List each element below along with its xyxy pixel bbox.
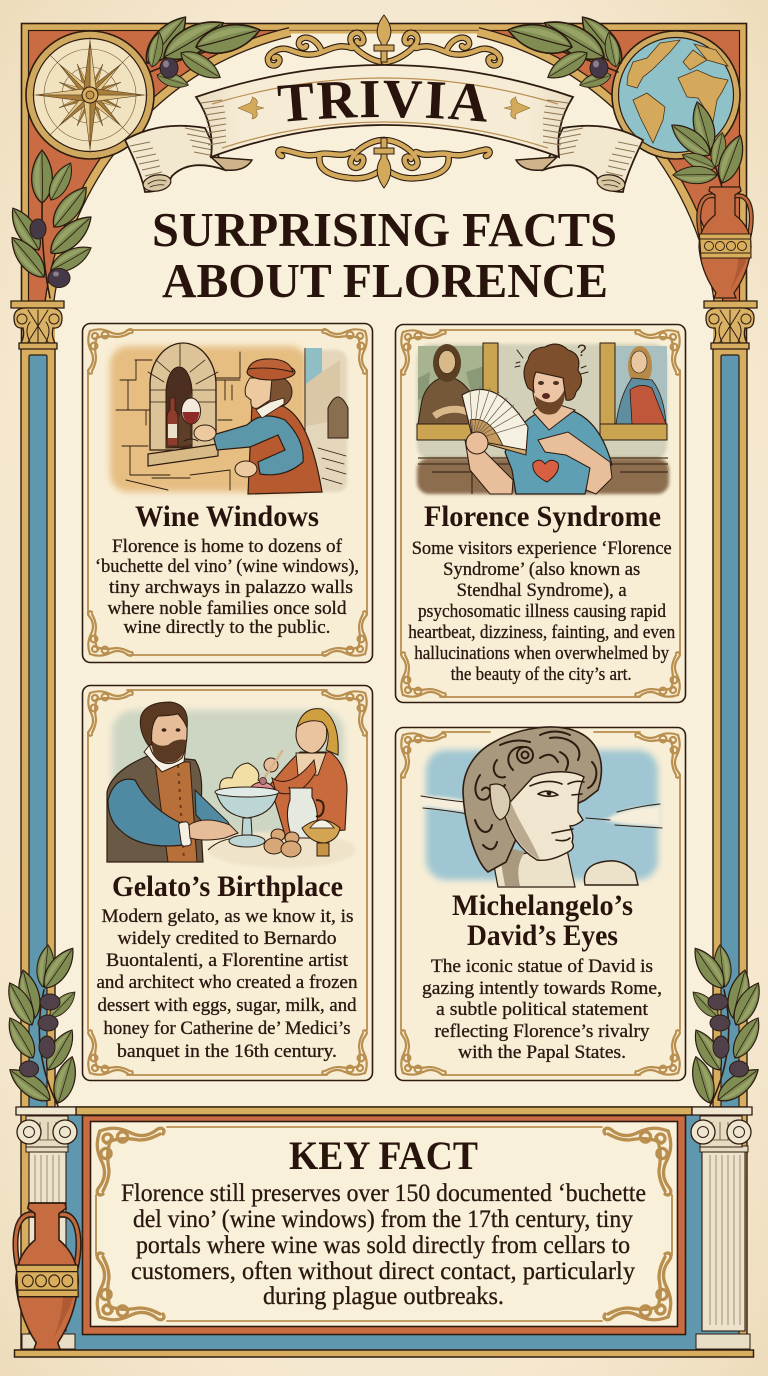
text block: portals where wine was sold directly from cellars to xyxy=(136,1232,630,1259)
text block: Some visitors experience ‘Florence xyxy=(412,539,672,559)
text block: Florence is home to dozens of xyxy=(112,537,343,557)
text block: psychosomatic illness causing rapid xyxy=(418,602,667,622)
panel: florence syndrome xyxy=(396,324,686,702)
text block: widely credited to Bernardo xyxy=(118,929,336,949)
text block: heartbeat, dizziness, fainting, and even xyxy=(408,623,675,643)
text block: Modern gelato, as we know it, is xyxy=(102,907,354,927)
title: TRIVIA: TRIVIA xyxy=(277,80,487,122)
text block: during plague outbreaks. xyxy=(263,1283,504,1310)
text block: Florence still preserves over 150 documented ‘buchette xyxy=(121,1180,646,1207)
heading: KEY FACT xyxy=(289,1133,478,1178)
title: TRIVIA xyxy=(277,80,487,122)
text block: hallucinations when overwhelmed by xyxy=(414,644,670,664)
panel: gelato's birthplace xyxy=(82,686,372,1080)
heading: Surprising Facts About Florence: SURPRISING FACTS xyxy=(152,202,617,257)
text block: tiny archways in palazzo walls xyxy=(109,578,353,598)
text block: gazing intently towards Rome, xyxy=(422,979,662,999)
right column xyxy=(704,301,757,1108)
text block: and architect who created a frozen xyxy=(96,973,358,993)
text block: with the Papal States. xyxy=(458,1043,626,1063)
heading: Gelato’s Birthplace xyxy=(112,870,343,903)
ornament below banner xyxy=(278,138,490,188)
lower right column xyxy=(691,1107,752,1349)
text block xyxy=(408,539,675,685)
panel: wine windows xyxy=(82,324,372,662)
base ledge xyxy=(14,1350,754,1357)
panel: michelangelo's david's eyes xyxy=(396,727,686,1080)
text block: reflecting Florence’s rivalry xyxy=(434,1022,650,1042)
text block: honey for Catherine de’ Medici’s xyxy=(104,1019,350,1039)
text block: del vino’ (wine windows) from the 17th century, tiny xyxy=(133,1206,633,1233)
olive branch lower left xyxy=(1,943,81,1108)
left column xyxy=(11,301,64,1108)
illustration: man at wine window xyxy=(110,343,348,494)
olive branch upper left side xyxy=(4,150,98,298)
frame: arch with terracotta spandrels xyxy=(22,24,746,1114)
illustration: Buontalenti presenting gelato xyxy=(107,702,356,868)
heading: Surprising Facts About Florence xyxy=(152,202,617,308)
text block: customers, often without direct contact, particularly xyxy=(131,1258,635,1285)
text block xyxy=(422,957,662,1063)
illustration: head of David xyxy=(420,727,662,887)
olive branch top left xyxy=(138,10,263,91)
text block: The iconic statue of David is xyxy=(431,957,653,977)
ornament above banner xyxy=(268,15,500,65)
illustration: overwhelmed visitor with fan xyxy=(417,341,669,494)
heading xyxy=(452,889,633,952)
text block: a subtle political statement xyxy=(436,1000,649,1020)
text block: dessert with eggs, sugar, milk, and xyxy=(98,996,357,1016)
illustration: overwhelmed visitor with fan: ? xyxy=(577,341,586,360)
text block: where noble families once sold xyxy=(108,599,347,619)
text block: Stendhal Syndrome), a xyxy=(457,581,627,601)
olive branch lower right xyxy=(687,943,767,1108)
icon: amphora upper right xyxy=(699,187,751,298)
text block: Buontalenti, a Florentine artist xyxy=(106,951,349,971)
heading: Wine Windows xyxy=(135,500,319,533)
heading: Michelangelo’s xyxy=(452,889,633,922)
banner ribbon tails xyxy=(125,126,643,193)
text block: ‘buchette del vino’ (wine windows), xyxy=(95,557,359,577)
text block: Syndrome’ (also known as xyxy=(443,560,640,580)
text block: the beauty of the city’s art. xyxy=(451,665,632,685)
fleurons beside title word xyxy=(238,97,530,119)
olive branch over globe xyxy=(666,99,750,187)
icon: compass rose xyxy=(26,31,154,159)
banner ribbon centre xyxy=(196,65,573,157)
panel: key fact xyxy=(82,1116,686,1334)
icon: globe xyxy=(612,31,740,159)
lower left column xyxy=(16,1107,77,1349)
text block: wine directly to the public. xyxy=(124,618,330,638)
text block xyxy=(95,537,359,638)
olive branch top right xyxy=(505,10,630,91)
text block xyxy=(121,1180,646,1310)
text block: banquet in the 16th century. xyxy=(117,1042,337,1062)
icon: amphora lower left xyxy=(15,1203,79,1350)
heading: David’s Eyes xyxy=(467,919,618,952)
lower band: blue backing with gold strips xyxy=(21,1107,747,1350)
text block xyxy=(96,907,358,1062)
heading: Florence Syndrome xyxy=(424,500,661,533)
heading: Surprising Facts About Florence: ABOUT FLORENCE xyxy=(162,253,608,308)
